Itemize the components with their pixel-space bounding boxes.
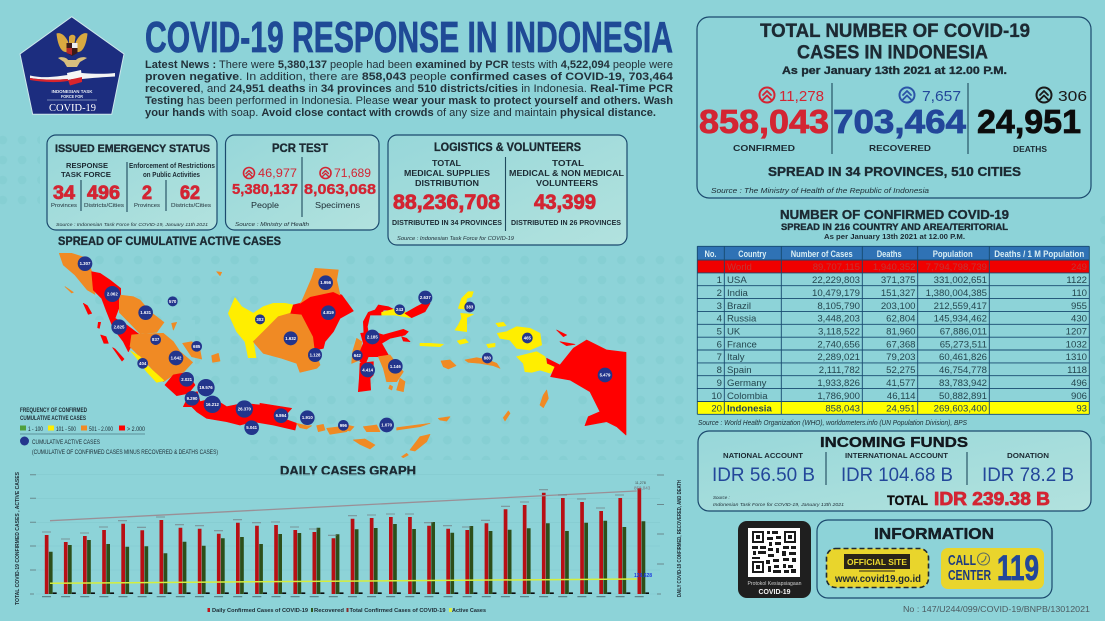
axis label: left: TOTAL COVID-19 CONFIRMED CASES , ACTIVE CASES [15, 472, 21, 605]
panel: total number of cases: DEATHS [1013, 144, 1047, 154]
panel: logistics and volunteers: VOLUNTEERS [536, 178, 598, 188]
table rows: 1207 [1066, 326, 1087, 338]
panel: total number of cases: CASES IN INDONESIA [797, 42, 988, 64]
panel: logistics and volunteers: DISTRIBUTED IN 34 PROVINCES [392, 218, 502, 227]
panel: issued emergency status: on Public Activities [143, 170, 200, 179]
table rows: 212,559,417 [934, 301, 987, 312]
table rows: 955 [1071, 301, 1087, 312]
recovered bars [49, 521, 645, 594]
table rows: 1122 [1066, 275, 1087, 286]
map markers: active cases west: 2.021 [181, 377, 193, 382]
panel: PCR test: 46,977 [258, 166, 297, 180]
map: Indonesia west [59, 253, 353, 434]
logo: Indonesian Task Force for COVID-19 [20, 17, 124, 114]
panel: total number of cases: Source : The Ministry of Health of the Republic of Indonesia [711, 186, 929, 195]
table rows: Italy [727, 352, 745, 363]
panel: issued emergency status: ISSUED EMERGENCY STATUS [55, 143, 210, 155]
table rows: 7,794,798,739 [926, 262, 987, 273]
table rows: 62,804 [886, 314, 916, 325]
text block: latest news: proven negative . In addition, there are 858,043 people confirmed cases of COVID-19, 703,464 [145, 71, 674, 83]
table rows: 1,940,352 [873, 262, 916, 273]
panel: incoming funds: TOTAL [887, 492, 928, 508]
table rows: Russia [727, 314, 757, 325]
panel: total number of cases: 11,278 [779, 88, 824, 105]
map legend: CUMULATIVE ACTIVE CASES [32, 439, 100, 446]
table rows: 1310 [1066, 352, 1087, 363]
table rows: 65,273,511 [940, 339, 987, 350]
table rows: 3 [717, 301, 722, 312]
panel: PCR test: PCR TEST [272, 141, 329, 155]
table rows: Indonesia [727, 404, 772, 415]
table rows: 203,100 [881, 301, 916, 312]
logo text [47, 89, 97, 114]
panel: incoming funds: IDR 78.2 B [982, 464, 1074, 486]
panel: incoming funds: IDR 104.68 B [841, 464, 953, 486]
panel: issued emergency status: 496 [87, 183, 120, 204]
panel: logistics and volunteers [388, 135, 627, 245]
official site badge: www.covid19.go.id [834, 574, 921, 585]
panel: PCR test: 71,689 [334, 166, 371, 180]
table rows: 67,886,011 [940, 326, 987, 338]
axis label: right: DAILY COVID-19 CONFIRMED, RECOVERED, AND DEATH [677, 480, 683, 597]
map markers: active cases west: 837 [152, 337, 160, 342]
table rows: 145,934,462 [934, 314, 987, 325]
map markers: active cases east [352, 291, 612, 432]
table rows: 7 [717, 352, 722, 363]
table header: Deaths / 1 M Population [994, 249, 1084, 259]
table rows: 1118 [1067, 365, 1087, 376]
map legend: 501 - 2.000 [89, 426, 113, 433]
table rows [711, 262, 1087, 415]
map markers: active cases west: 19.576 [199, 385, 213, 390]
value ticks, too small to read in the reference [42, 490, 624, 539]
map legend: 1 - 100 [28, 426, 43, 433]
text block: latest news: Testing has been performed in Indonesia. Please wear your mask to protect yourself and others. Wash [145, 95, 673, 107]
logo text: COVID-19 [49, 102, 96, 114]
map markers: active cases east: 383 [466, 304, 474, 309]
QR code card [738, 521, 811, 598]
map markers: active cases west: 4.819 [323, 310, 334, 315]
QR code card: COVID-19 [758, 587, 790, 596]
panel: information: INFORMATION [874, 526, 994, 543]
table rows: 3,118,522 [818, 326, 860, 338]
table rows: 8 [717, 365, 722, 376]
table rows: 249 [1071, 262, 1087, 273]
icon: telephone [978, 553, 990, 565]
map markers: active cases west: 1.128 [310, 352, 321, 357]
heading: daily cases graph: DAILY CASES GRAPH [280, 464, 416, 478]
icon: up arrow specimens [320, 168, 331, 178]
table rows: Colombia [727, 391, 768, 402]
map markers: active cases east: 5.479 [600, 372, 611, 377]
table rows: 906 [1071, 391, 1087, 402]
chart legend: Total Confirmed Cases of COVID-19 [350, 608, 446, 614]
deaths bars [53, 592, 649, 594]
table rows: 41,577 [886, 378, 916, 389]
QR code card: Protokol Kesiapsiagaan [748, 581, 802, 587]
chart legend: Active Cases [452, 608, 486, 614]
map markers: active cases east: 2.185 [367, 334, 378, 339]
table rows: 2,111,782 [819, 365, 860, 376]
table rows: 22,229,803 [812, 275, 860, 286]
table rows: 46,114 [887, 391, 916, 402]
map markers: active cases west: 1.307 [80, 261, 91, 266]
map markers: active cases west: 685 [193, 344, 201, 349]
value: latest daily cases: 11,278 [635, 481, 646, 485]
map markers: active cases east: 465 [524, 335, 532, 340]
panel: information [817, 520, 1052, 598]
panel: total number of cases: As per January 13th 2021 at 12.00 P.M. [782, 65, 1007, 77]
table header: No. [704, 249, 716, 259]
icon: confirmed increase [760, 88, 774, 102]
map markers: active cases west: 2.825 [114, 324, 125, 329]
table rows: 1,786,900 [817, 391, 860, 402]
panel: issued emergency status: Source : Indonesian Task Force for COVID-19, January 11th 2021 [56, 222, 208, 227]
panel: total number of cases: CONFIRMED [733, 143, 795, 153]
map markers: active cases west: 996 [340, 423, 348, 428]
document number: No : 147/U244/099/COVID-19/BNPB/13012021 [903, 604, 1090, 614]
panel: incoming funds: INTERNATIONAL ACCOUNT [845, 451, 948, 460]
table header: Country [738, 249, 766, 259]
map markers: active cases west: 26.370 [238, 406, 252, 411]
panel: logistics and volunteers: MEDICAL & NON MEDICAL [509, 168, 624, 178]
table rows: 9 [717, 378, 722, 389]
title: COVID-19 RESPONSE IN INDONESIA [145, 13, 673, 62]
map legend: CUMULATIVE ACTIVE CASES [20, 415, 86, 422]
panel: issued emergency status: RESPONSE [66, 161, 108, 170]
map markers: active cases west: 1.642 [171, 355, 182, 360]
value: total confirmed: 858,043 [634, 486, 651, 490]
panel: logistics and volunteers: DISTRIBUTED IN 26 PROVINCES [511, 218, 621, 227]
table rows: 2 [717, 288, 722, 299]
active cases line [50, 579, 637, 583]
panel: issued emergency status: 34 [53, 183, 75, 204]
map legend: > 2.000 [127, 426, 145, 433]
table rows: 151,327 [881, 288, 916, 299]
table rows: 24,951 [886, 404, 916, 415]
icon: QR code [752, 531, 796, 573]
map legend [20, 407, 218, 456]
panel: issued emergency status: Enforcement of Restrictions [129, 161, 215, 170]
table rows: 67,368 [886, 339, 916, 350]
map markers: active cases west: 16.212 [206, 402, 220, 407]
panel: issued emergency status: TASK FORCE [61, 170, 111, 179]
map markers: active cases east: 1.070 [381, 422, 393, 427]
table rows: 2,289,021 [817, 352, 860, 363]
panel: incoming funds: DONATION [1007, 451, 1049, 460]
emblem: garuda [56, 33, 88, 67]
heading: number of confirmed COVID-19: As per January 13th 2021 at 12.00 P.M. [824, 232, 965, 241]
table rows: 83,783,942 [939, 378, 987, 389]
table rows: 1,933,826 [817, 378, 860, 389]
heading: number of confirmed COVID-19 [780, 208, 1009, 241]
panel: issued emergency status: 62 [180, 183, 200, 204]
table rows: 10 [711, 391, 722, 402]
map markers: active cases west: 1.632 [285, 336, 297, 341]
panel: logistics and volunteers: Source : Indonesian Task Force for COVID-19 [397, 236, 514, 242]
call center badge [941, 548, 1044, 589]
chart legend: Recovered [314, 608, 344, 614]
ribbon and flag [30, 70, 115, 86]
table rows: 496 [1071, 378, 1087, 389]
table rows: USA [727, 275, 747, 286]
table header: Number of Cases [791, 249, 853, 259]
panel: PCR test: People [251, 201, 280, 210]
table rows: 858,043 [825, 404, 860, 415]
panel: PCR test: Specimens [315, 201, 360, 210]
table rows: 8,105,790 [817, 301, 860, 312]
map markers: active cases east: 642 [354, 353, 362, 358]
table rows: 3,448,203 [817, 314, 860, 325]
table rows: Brazil [727, 301, 751, 312]
table rows: 50,882,891 [939, 391, 987, 402]
map markers: active cases west: 570 [169, 299, 177, 304]
panel: total number of cases: 306 [1058, 88, 1087, 105]
panel: total number of cases: RECOVERED [869, 143, 931, 153]
table rows: 110 [1072, 288, 1087, 299]
map markers: active cases west: 6.864 [276, 413, 287, 418]
heading: number of confirmed COVID-19: SPREAD IN 216 COUNTRY AND AREA/TERITORIAL [781, 222, 1009, 232]
text block: latest news: your hands with soap. Avoid close contact with crowds of any size and maintain physical distance. [145, 107, 656, 119]
panel: issued emergency status: Districts/Cities [171, 203, 211, 209]
icon: up arrow people [244, 168, 254, 178]
table rows: World [727, 262, 752, 273]
text block: latest news: Latest News : There were 5,380,137 people had been examined by PCR tests with 4,522,094 people were [145, 59, 673, 71]
map markers: active cases west: 302 [256, 317, 264, 322]
panel: total number of cases [697, 17, 1091, 198]
panel: incoming funds: IDR 239.38 B [934, 489, 1050, 509]
table rows: 1 [717, 275, 722, 286]
table rows: 371,375 [881, 275, 916, 286]
panel: issued emergency status [47, 135, 217, 230]
panel: issued emergency status: 2 [142, 183, 152, 204]
map markers: active cases east: 1.146 [390, 364, 401, 369]
total confirmed line [50, 491, 637, 521]
logo text: FORCE FOR [61, 94, 84, 99]
map markers: active cases west: 1.631 [140, 310, 152, 315]
table rows: 1032 [1066, 339, 1087, 350]
call center badge: CENTER [948, 568, 991, 584]
table: confirmed cases by country [697, 246, 1089, 415]
map markers: active cases west: 1.956 [320, 280, 332, 285]
panel: total number of cases: 24,951 [977, 103, 1081, 140]
panel: logistics and volunteers: 88,236,708 [393, 191, 500, 214]
chart legend [208, 608, 486, 614]
panel: logistics and volunteers: TOTAL [432, 158, 461, 168]
panel: incoming funds [698, 431, 1091, 511]
text block: latest news: recovered, and 24,951 deaths in 34 provinces and 510 districts/cities in Indonesia. Real-Time PCR [145, 83, 673, 95]
table rows: 2,740,656 [817, 339, 860, 350]
map markers: active cases east: 880 [484, 355, 492, 360]
table rows: 81,960 [886, 326, 916, 338]
map: Indonesia east [345, 292, 626, 458]
panel: total number of cases: 858,043 [699, 103, 829, 140]
panel: total number of cases: TOTAL NUMBER OF COVID-19 [760, 21, 1030, 42]
daily confirmed bars [45, 488, 641, 594]
chart: daily cases graph [30, 475, 664, 597]
map legend: (CUMULATIVE OF CONFIRMED CASES MINUS RECOVERED & DEATHS CASES) [32, 449, 218, 456]
map markers: active cases west: 1.910 [302, 415, 313, 420]
panel: total number of cases: SPREAD IN 34 PROVINCES, 510 CITIES [768, 164, 1021, 179]
map markers: active cases west: 2.062 [107, 291, 118, 296]
table rows: 5 [717, 326, 722, 338]
table rows: 4 [717, 314, 723, 325]
table rows: 79,203 [886, 352, 916, 363]
map markers: active cases east: 243 [396, 307, 404, 312]
panel: incoming funds: Source : [713, 495, 731, 500]
panel: total number of cases: 703,464 [833, 103, 967, 140]
map markers: active cases west: 5.041 [246, 425, 258, 430]
panel: issued emergency status: Provinces [134, 203, 160, 209]
panel: issued emergency status: Districts/Cities [84, 203, 124, 209]
table rows: 52,275 [886, 365, 916, 376]
map legend: 101 - 500 [56, 426, 76, 433]
logo text: INDONESIAN TASK [52, 89, 93, 94]
map markers: active cases west: 9.290 [187, 396, 198, 401]
panel: PCR test: 5,380,137 [232, 181, 298, 198]
table source: Source : World Health Organization (WHO), worldometers.info (UN Population Division), BPS [698, 420, 967, 427]
panel: issued emergency status: Provinces [51, 203, 77, 209]
table rows: 331,002,651 [934, 275, 987, 286]
map markers: active cases east: 4.414 [362, 367, 374, 372]
panel: PCR test: 8,063,068 [304, 181, 376, 198]
map markers: active cases east: 2.637 [420, 295, 431, 300]
table rows: 20 [711, 404, 722, 415]
table header: Population [933, 249, 973, 259]
panel: incoming funds: IDR 56.50 B [712, 464, 815, 486]
panel: logistics and volunteers: TOTAL [552, 158, 584, 168]
date labels, too small to read in the reference [42, 596, 645, 598]
icon: deaths increase [1036, 88, 1052, 102]
call center badge: 119 [997, 549, 1039, 588]
table rows: 89,707,115 [813, 262, 860, 273]
official site badge: OFFICIAL SITE [847, 557, 907, 567]
panel: incoming funds: INCOMING FUNDS [820, 434, 968, 451]
table header [704, 249, 1084, 259]
table rows: 6 [717, 339, 722, 350]
chart legend: Daily Confirmed Cases of COVID-19 [212, 608, 309, 614]
table rows: 46,754,778 [939, 365, 987, 376]
panel: logistics and volunteers: LOGISTICS & VOLUNTEERS [434, 140, 581, 154]
map markers: active cases west [78, 256, 349, 435]
panel: PCR test [226, 135, 379, 230]
panel: logistics and volunteers: MEDICAL SUPPLIES [404, 168, 490, 178]
table rows: 10,479,179 [812, 288, 860, 299]
table rows: 1,380,004,385 [926, 288, 987, 299]
table rows: 93 [1076, 404, 1087, 415]
call center badge: CALL [948, 553, 976, 569]
table rows: 430 [1071, 314, 1087, 325]
panel: PCR test: Source : Ministry of Health [235, 222, 309, 228]
panel: incoming funds: NATIONAL ACCOUNT [723, 451, 803, 460]
table rows: Spain [727, 365, 752, 376]
official site badge [826, 548, 928, 588]
panel: incoming funds: Indonesian Task Force for COVID-19, January 13th 2021 [713, 502, 845, 507]
heading: spread of cumulative active cases: SPREAD OF CUMULATIVE ACTIVE CASES [58, 234, 281, 248]
table header: Deaths [877, 249, 902, 259]
panel: logistics and volunteers: 43,399 [534, 191, 596, 214]
table rows: France [727, 339, 757, 350]
table rows: Germany [727, 378, 767, 389]
map markers: active cases west: 404 [139, 361, 147, 366]
icon: recovered increase [900, 88, 914, 102]
table rows: 60,461,826 [939, 352, 987, 363]
panel: total number of cases: 7,657 [922, 88, 961, 105]
map legend: FREQUENCY OF CONFIRMED [20, 407, 87, 414]
table rows: UK [727, 326, 741, 338]
table rows: India [727, 288, 748, 299]
text block: latest news [145, 59, 674, 119]
value: active cases: 129,628 [634, 573, 652, 579]
heading: number of confirmed COVID-19: NUMBER OF CONFIRMED COVID-19 [780, 208, 1009, 222]
panel: logistics and volunteers: DISTRIBUTION [415, 178, 479, 188]
table rows: 269,603,400 [934, 404, 987, 415]
